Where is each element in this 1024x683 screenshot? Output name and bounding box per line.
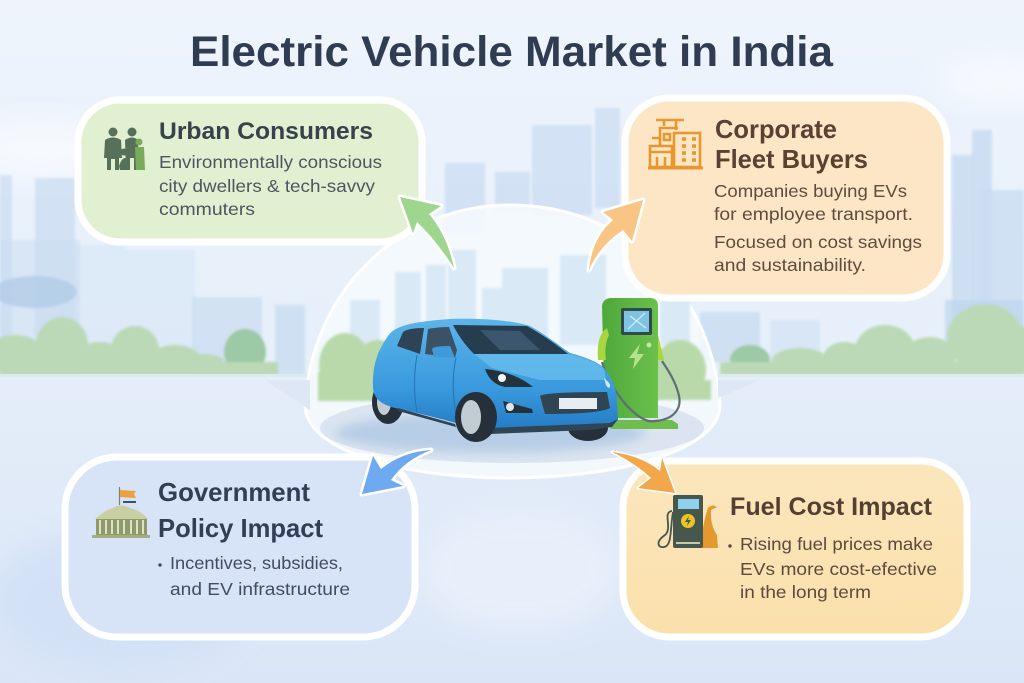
heading: Policy Impact xyxy=(158,513,323,543)
road xyxy=(320,393,704,463)
number plate xyxy=(559,398,597,409)
bumper xyxy=(490,419,618,434)
arrow: to urban consumers xyxy=(400,197,454,268)
body text: and sustainability. xyxy=(714,255,866,275)
icon: family xyxy=(104,128,145,170)
panel: fuel cost impact xyxy=(623,461,967,637)
body text xyxy=(728,534,937,602)
windshield xyxy=(453,325,568,354)
arrow: to fuel cost impact xyxy=(612,452,675,493)
headlight xyxy=(485,369,533,387)
front wheel xyxy=(455,392,497,442)
heading: Corporate xyxy=(715,114,837,144)
heading: Urban Consumers xyxy=(159,118,373,145)
body text xyxy=(714,181,922,275)
city skyline xyxy=(0,108,1024,375)
body text: in the long term xyxy=(740,582,871,602)
heading xyxy=(715,114,868,174)
side windows xyxy=(397,328,424,354)
body text: commuters xyxy=(159,199,255,219)
dome backdrop xyxy=(265,205,760,478)
icon: office buildings xyxy=(648,120,703,168)
body text: Environmentally conscious xyxy=(159,152,382,172)
panel: urban consumers xyxy=(78,100,422,242)
tree line left xyxy=(0,317,278,375)
grille xyxy=(540,392,610,414)
body text: city dwellers & tech-savvy xyxy=(159,176,375,196)
body text: Rising fuel prices make xyxy=(740,534,933,554)
body text: Focused on cost savings xyxy=(714,232,922,252)
sill xyxy=(398,408,456,427)
rear wheel xyxy=(372,380,404,424)
title: Electric Vehicle Market in India xyxy=(190,28,834,76)
arrow: to government policy xyxy=(362,450,431,494)
fog lamp xyxy=(503,401,533,413)
horizon ground xyxy=(0,374,1024,377)
heading: Fleet Buyers xyxy=(715,144,868,174)
far wheel xyxy=(568,415,608,441)
dome trees xyxy=(318,333,711,401)
heading: Fuel Cost Impact xyxy=(730,493,933,521)
icon: fuel pump xyxy=(658,495,718,548)
panel: corporate fleet buyers xyxy=(625,98,947,298)
car body xyxy=(373,319,618,433)
arrow: to corporate fleet buyers xyxy=(589,200,643,270)
tree line right xyxy=(720,304,1024,375)
body text: Companies buying EVs xyxy=(714,181,907,201)
heading xyxy=(158,477,323,543)
charging cable xyxy=(602,361,680,421)
body text: EVs more cost-efective xyxy=(740,559,937,579)
body text xyxy=(158,553,350,599)
icon: government building xyxy=(92,487,150,538)
dome skyline xyxy=(350,250,690,350)
electric car xyxy=(372,319,618,442)
door line xyxy=(414,355,457,420)
hood highlight xyxy=(474,354,606,380)
heading: Government xyxy=(158,477,310,507)
body text: for employee transport. xyxy=(714,204,913,224)
body text xyxy=(159,152,382,219)
body text: Incentives, subsidies, xyxy=(170,553,343,573)
body text: and EV infrastructure xyxy=(170,579,350,599)
panel: government policy impact xyxy=(65,457,415,637)
charging station xyxy=(598,298,680,429)
mirror xyxy=(432,346,455,358)
